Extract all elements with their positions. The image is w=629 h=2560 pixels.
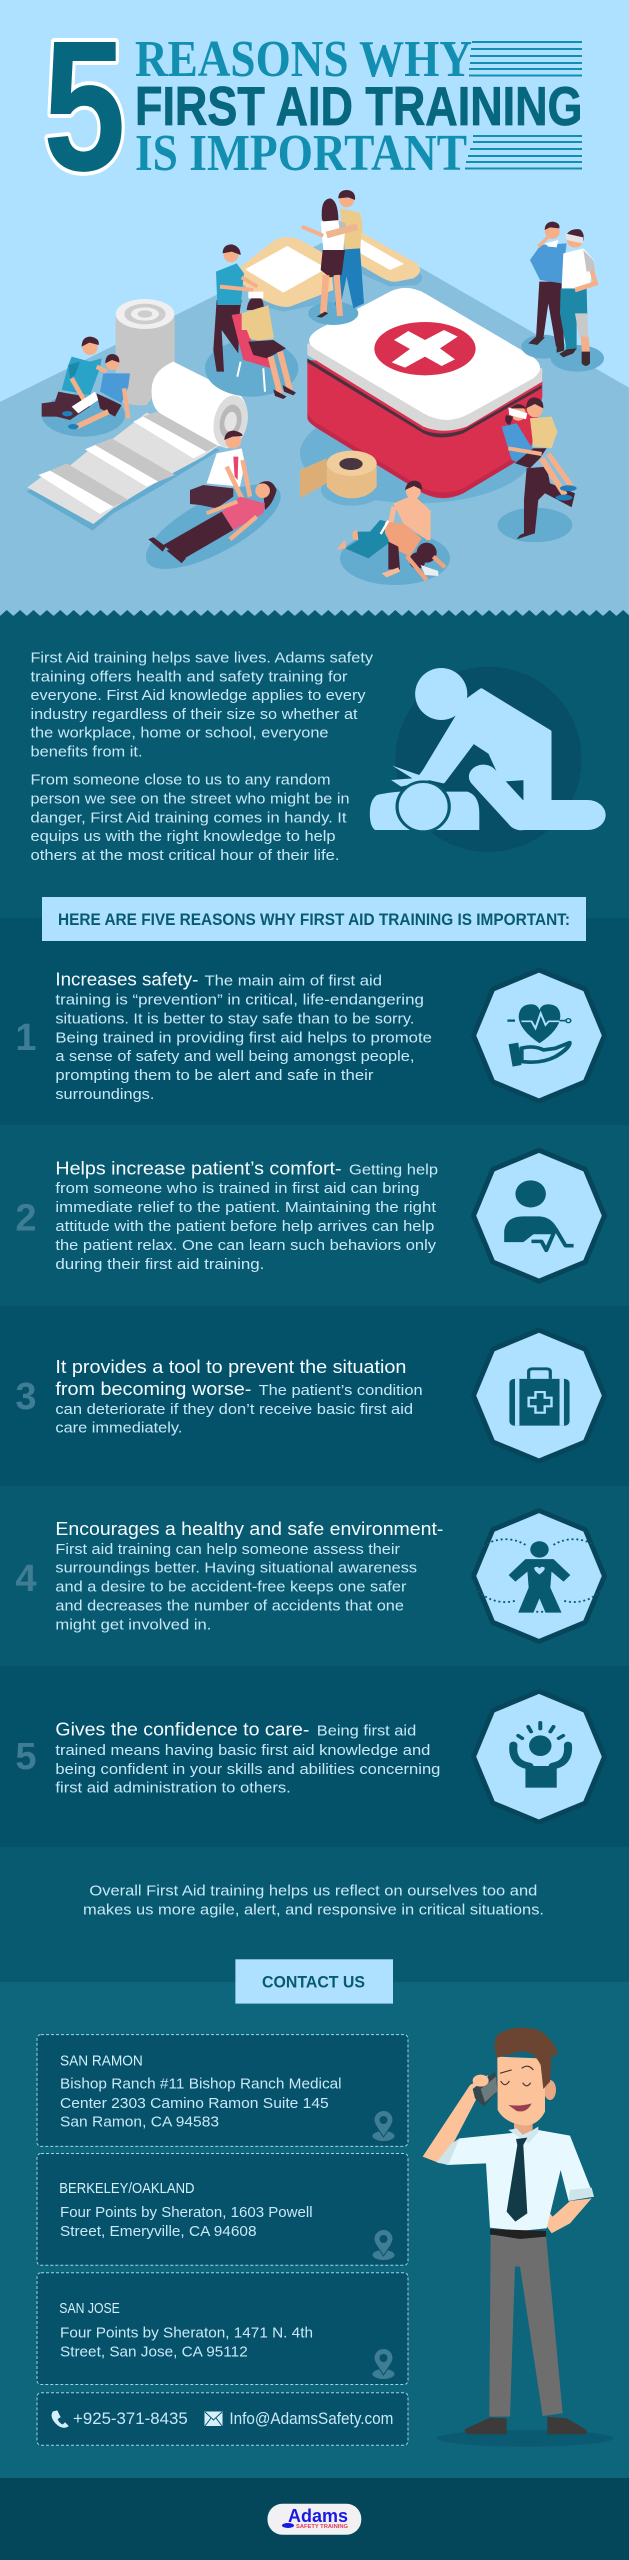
unrolled bandage bbox=[27, 362, 252, 531]
title stripes bbox=[465, 41, 582, 170]
hero illustration bbox=[27, 190, 604, 585]
reason 4 text: First aid training can help someone assess their bbox=[55, 1542, 400, 1558]
reason 1 text: situations. It is better to stay safe than to be sorry. bbox=[55, 1011, 414, 1027]
card: Berkeley/Oakland: Street, Emeryville, CA 94608 bbox=[60, 2224, 256, 2240]
contact background bbox=[0, 1982, 629, 2478]
icon: confident person bbox=[474, 1691, 604, 1822]
reason 2 text: Helps increase patient’s comfort- bbox=[55, 1158, 342, 1178]
contact us button: CONTACT US bbox=[262, 1972, 365, 1991]
panel: introduction bbox=[0, 610, 629, 918]
reason 4 text: and a desire to be accident-free keeps one safer bbox=[55, 1580, 407, 1596]
icon: heart in hand bbox=[474, 970, 604, 1101]
heading banner bbox=[42, 897, 586, 941]
illustration: man on phone bbox=[423, 2028, 613, 2447]
panel: reasons background bands bbox=[0, 918, 629, 1847]
number 3: 3 bbox=[15, 1376, 37, 1418]
panel: hero background bbox=[0, 0, 629, 617]
reason 5 text: first aid administration to others. bbox=[55, 1781, 291, 1797]
reason 1 text: Increases safety- bbox=[55, 970, 198, 990]
logo bbox=[268, 2504, 361, 2535]
people: man bandaging seated woman bbox=[205, 244, 298, 399]
card: Berkeley/Oakland bbox=[37, 2154, 408, 2265]
reason 5 text: being confident in your skills and abilities concerning bbox=[55, 1762, 440, 1778]
big number 5: 5 bbox=[43, 2, 126, 210]
panel: contact section bbox=[0, 1959, 629, 2478]
card: San Ramon: SAN RAMON bbox=[60, 2052, 143, 2069]
intro paragraph 1: benefits from it. bbox=[30, 745, 142, 761]
reason 3 text: care immediately. bbox=[55, 1421, 182, 1437]
panel: closing statement bbox=[0, 1847, 629, 1982]
panel: closing statement: makes us more agile, alert, and responsive in critical situations. bbox=[83, 1902, 544, 1918]
reason 1 text bbox=[55, 970, 432, 1103]
panel: reason 2 bbox=[15, 1150, 604, 1281]
giant plaster bbox=[239, 232, 422, 312]
reason 1 text: The main aim of first aid bbox=[204, 974, 382, 990]
panel: reason 1 bbox=[15, 970, 604, 1103]
reason 2 text: the patient relax. One can learn such behaviors only bbox=[55, 1238, 437, 1254]
reason 3 text: The patient’s condition bbox=[259, 1383, 423, 1399]
intro paragraph 2 bbox=[30, 773, 350, 864]
intro paragraph 2: danger, First Aid training comes in handy. It bbox=[30, 810, 346, 826]
people: man carrying woman bbox=[498, 397, 577, 542]
people: kneeling man and child bbox=[42, 337, 130, 437]
reason 3 text: It provides a tool to prevent the situation bbox=[55, 1357, 406, 1377]
heading banner: HERE ARE FIVE REASONS WHY FIRST AID TRAINING IS IMPORTANT: bbox=[58, 910, 570, 929]
title line 1: REASONS WHY bbox=[135, 31, 472, 88]
card: Berkeley/Oakland: BERKELEY/OAKLAND bbox=[59, 2180, 195, 2197]
card: Berkeley/Oakland: Four Points by Sheraton, 1603 Powell bbox=[60, 2205, 313, 2221]
reason 2 text bbox=[55, 1158, 438, 1273]
people: recovery position bbox=[337, 481, 450, 585]
panel: reason 3 bbox=[15, 1330, 604, 1461]
reason 2 text: during their first aid training. bbox=[55, 1257, 264, 1273]
intro paragraph 1 bbox=[30, 650, 374, 761]
email address: Info@AdamsSafety.com bbox=[229, 2409, 393, 2428]
card: San Ramon bbox=[37, 2035, 408, 2146]
icon: patient with pulse bbox=[474, 1150, 604, 1281]
icon: CPR pictogram bbox=[370, 667, 588, 852]
intro paragraph 2: From someone close to us to any random bbox=[30, 773, 330, 789]
people: CPR pair bbox=[135, 431, 292, 585]
reason 2 text: immediate relief to the patient. Maintaining the right bbox=[55, 1200, 436, 1216]
reason 5 text: trained means having basic first aid knowledge and bbox=[55, 1743, 430, 1759]
people: two men standing bbox=[521, 222, 604, 372]
card: phone and email bbox=[37, 2393, 408, 2445]
reason 1 text: surroundings. bbox=[55, 1087, 154, 1103]
intro paragraph 1: everyone. First Aid knowledge applies to every bbox=[30, 688, 366, 704]
reason 1 text: prompting them to be alert and safe in their bbox=[55, 1068, 374, 1084]
card: San Jose: Street, San Jose, CA 95112 bbox=[60, 2344, 248, 2360]
reason 1 text: Being trained in providing first aid helps to promote bbox=[55, 1030, 432, 1046]
first aid kit bbox=[300, 288, 542, 503]
reason 3 text: can deteriorate if they don’t receive basic first aid bbox=[55, 1402, 413, 1418]
standing bandage roll bbox=[116, 299, 175, 405]
title line 3: IS IMPORTANT bbox=[135, 125, 467, 182]
panel: footer bbox=[0, 2478, 629, 2560]
reason 4 text: might get involved in. bbox=[55, 1617, 211, 1633]
intro paragraph 2: equips us with the right knowledge to help bbox=[30, 829, 336, 845]
card: San Jose: Four Points by Sheraton, 1471 N. 4th bbox=[60, 2325, 313, 2341]
phone number: +925-371-8435 bbox=[73, 2409, 188, 2428]
intro paragraph 2: others at the most critical hour of their life. bbox=[30, 848, 340, 864]
number 4: 4 bbox=[15, 1558, 37, 1600]
reason 5 text: Gives the confidence to care- bbox=[55, 1720, 309, 1740]
card: San Ramon: Center 2303 Camino Ramon Suite 145 bbox=[60, 2096, 329, 2112]
zigzag edge bbox=[0, 610, 629, 616]
number 2: 2 bbox=[15, 1198, 37, 1240]
icon: map pin bbox=[372, 2230, 394, 2260]
people: couple standing bbox=[303, 190, 364, 325]
icon: map pin bbox=[372, 2110, 394, 2141]
icon: medical case bbox=[474, 1330, 604, 1461]
reason 4 text: Encourages a healthy and safe environment- bbox=[55, 1519, 443, 1539]
card: San Ramon: Bishop Ranch #11 Bishop Ranch Medical bbox=[60, 2076, 342, 2092]
intro paragraph 1: training offers health and safety training for bbox=[30, 669, 348, 685]
panel: closing statement: Overall First Aid training helps us reflect on ourselves too and bbox=[89, 1883, 537, 1899]
icon: phone bbox=[52, 2411, 68, 2427]
reason 3 text: from becoming worse- bbox=[55, 1379, 251, 1399]
icon: envelope bbox=[204, 2412, 222, 2426]
reason 3 text bbox=[55, 1357, 423, 1437]
intro paragraph 1: industry regardless of their size so whether at bbox=[30, 707, 358, 723]
reason 4 text: and decreases the number of accidents that one bbox=[55, 1598, 404, 1614]
intro paragraph 1: First Aid training helps save lives. Adams safety bbox=[30, 650, 374, 666]
logo: Adams bbox=[288, 2506, 348, 2526]
panel: reason 5 bbox=[15, 1691, 604, 1822]
number 1: 1 bbox=[15, 1017, 37, 1059]
reason 2 text: attitude with the patient before help arrives can help bbox=[55, 1219, 434, 1235]
logo: SAFETY TRAINING bbox=[296, 2524, 348, 2530]
reason 4 text bbox=[55, 1519, 443, 1633]
reason 2 text: Getting help bbox=[349, 1162, 438, 1178]
icon: body with heart bbox=[470, 1510, 609, 1642]
reason 4 text: surroundings better. Having situational awareness bbox=[55, 1561, 417, 1577]
upper figures bbox=[205, 300, 298, 399]
title bbox=[43, 2, 582, 210]
card: San Jose: SAN JOSE bbox=[59, 2300, 120, 2317]
intro paragraph 1: the workplace, home or school, everyone bbox=[30, 726, 329, 742]
intro background bbox=[0, 616, 629, 918]
reason 5 text: Being first aid bbox=[317, 1724, 416, 1740]
reason 2 text: from someone who is trained in first aid can bring bbox=[55, 1181, 419, 1197]
intro paragraph 2: person we see on the street who might be in bbox=[30, 791, 350, 807]
reason 5 text bbox=[55, 1720, 440, 1797]
number 5: 5 bbox=[15, 1736, 37, 1778]
tape roll bbox=[300, 451, 382, 506]
card: San Ramon: San Ramon, CA 94583 bbox=[60, 2114, 219, 2130]
card: San Jose bbox=[37, 2273, 408, 2384]
icon: map pin bbox=[372, 2348, 394, 2379]
reason 1 text: training is “prevention” in critical, life-endangering bbox=[55, 993, 424, 1009]
hero floor bbox=[0, 228, 629, 617]
panel: reason 4 bbox=[15, 1510, 609, 1642]
reason 1 text: a sense of safety and well being amongst people, bbox=[55, 1049, 414, 1065]
contact us button bbox=[235, 1959, 393, 2004]
